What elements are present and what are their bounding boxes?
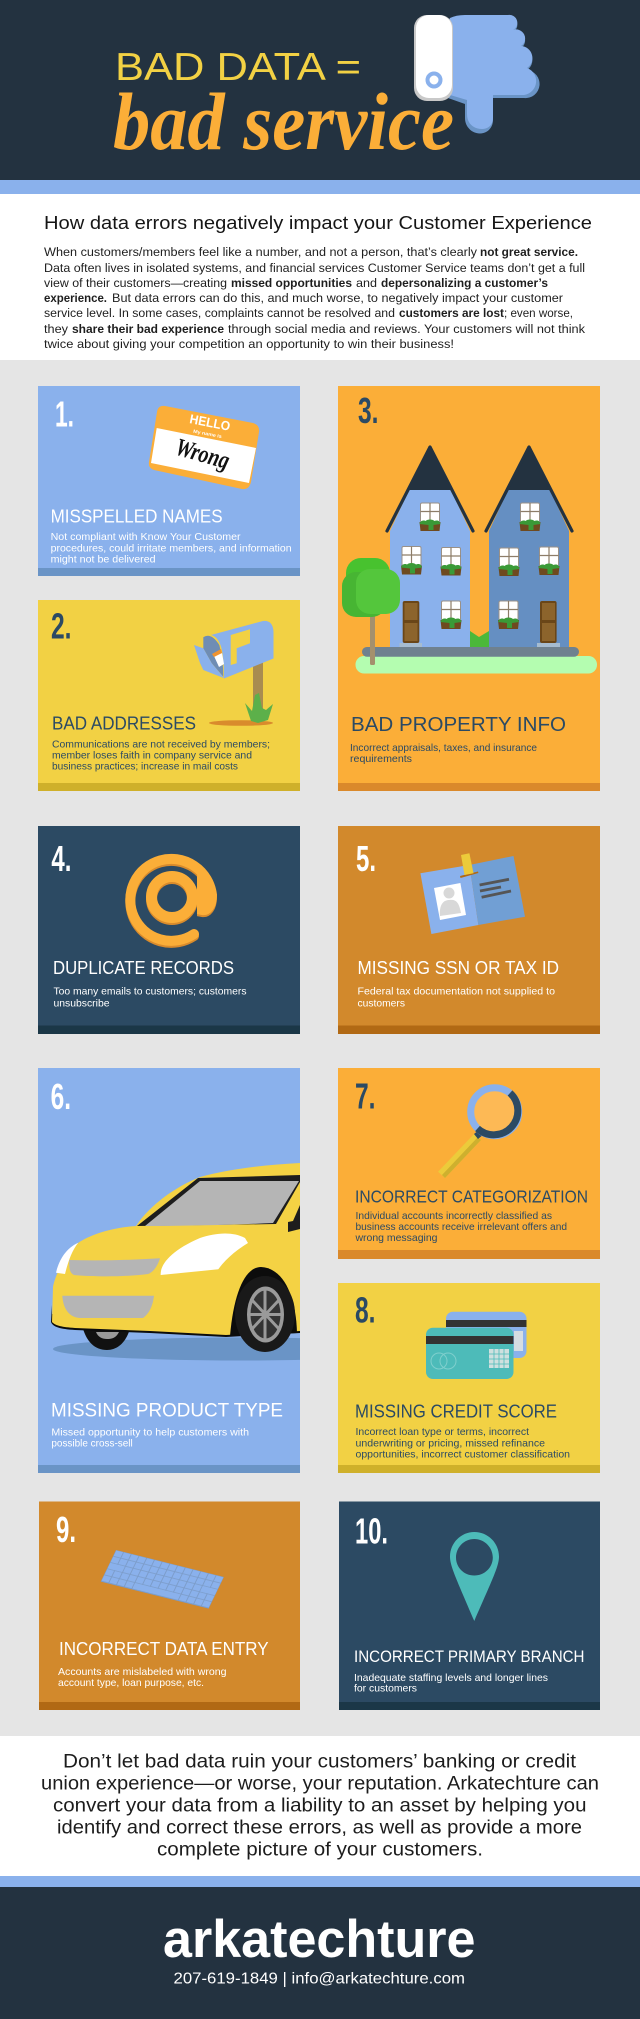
number 2: 2. <box>51 606 72 646</box>
number 1: 1. <box>55 394 74 434</box>
title: INCORRECT CATEGORIZATION <box>355 1187 588 1207</box>
icon: houses and tree <box>342 447 597 674</box>
number 10: 10. <box>355 1510 388 1552</box>
icon: name tag: Wrong <box>172 434 233 475</box>
icon: id card <box>420 853 525 934</box>
closing statement: identify and correct these errors, as well as provide a more <box>57 1817 582 1839</box>
description <box>354 1673 548 1695</box>
number 4: 4. <box>51 838 71 879</box>
intro paragraph <box>44 245 586 351</box>
card 9: incorrect data entry <box>39 1502 300 1710</box>
description: Accounts are mislabeled with wrong <box>58 1667 227 1678</box>
intro paragraph: depersonalizing a customer’s <box>381 276 548 290</box>
number 3: 3. <box>358 390 378 431</box>
icon: at sign <box>130 859 212 943</box>
description: Communications are not received by members; <box>52 739 270 750</box>
left house <box>387 447 473 649</box>
right house <box>486 447 572 647</box>
title: INCORRECT PRIMARY BRANCH <box>354 1648 584 1666</box>
description: procedures, could irritate members, and information <box>51 544 292 555</box>
intro paragraph: Data often lives in isolated systems, and financial services Customer Service teams don’t get a full <box>44 261 585 275</box>
description: Individual accounts incorrectly classified as <box>356 1211 552 1222</box>
card 3: bad property info <box>338 386 600 791</box>
number 6: 6. <box>51 1076 71 1117</box>
intro paragraph: not great service. <box>480 245 578 259</box>
title: BAD PROPERTY INFO <box>351 714 566 736</box>
icon: credit cards <box>426 1312 526 1379</box>
card 4: duplicate records <box>38 826 300 1034</box>
icon: name tag: My name is <box>193 429 223 439</box>
number 5: 5. <box>356 838 376 879</box>
description: Inadequate staffing levels and longer lines <box>354 1673 548 1684</box>
title: MISSPELLED NAMES <box>51 506 223 526</box>
header banner <box>0 0 640 194</box>
description: might not be delivered <box>51 555 156 566</box>
icon: mailbox <box>194 621 274 726</box>
card 10: incorrect primary branch <box>339 1502 600 1710</box>
intro paragraph: missed opportunities <box>231 276 352 290</box>
card 2: bad addresses <box>38 600 300 791</box>
closing statement: complete picture of your customers. <box>157 1838 483 1860</box>
title: BAD ADDRESSES <box>52 713 196 733</box>
icon: magnifying glass <box>438 1088 519 1178</box>
description: Federal tax documentation not supplied to <box>358 986 555 997</box>
description: wrong messaging <box>354 1233 438 1244</box>
intro paragraph: But data errors can do this, and much worse, to negatively impact your customer <box>112 291 563 305</box>
card 8: missing credit score <box>338 1283 600 1473</box>
footer <box>0 1876 640 2019</box>
gray panel background <box>0 360 640 1736</box>
tree <box>342 558 400 665</box>
intro paragraph: service level. In some cases, complaints cannot be resolved and <box>44 306 395 320</box>
title: MISSING SSN OR TAX ID <box>358 958 559 978</box>
intro section <box>44 213 592 351</box>
description <box>58 1667 227 1689</box>
description <box>358 986 555 1010</box>
description: requirements <box>350 754 412 765</box>
icon: name tag <box>149 406 259 489</box>
card 5: missing ssn or tax id <box>338 826 600 1034</box>
description <box>354 1211 567 1244</box>
description: unsubscribe <box>54 999 110 1010</box>
number 8: 8. <box>355 1290 376 1331</box>
closing statement <box>41 1751 599 1860</box>
title: MISSING CREDIT SCORE <box>355 1402 557 1422</box>
icon: yellow car <box>51 1163 300 1360</box>
description: account type, loan purpose, etc. <box>58 1678 204 1689</box>
description: Not compliant with Know Your Customer <box>51 532 241 543</box>
description: customers <box>358 999 405 1010</box>
intro paragraph: they <box>44 322 69 336</box>
title: MISSING PRODUCT TYPE <box>51 1401 283 1422</box>
intro paragraph: ; even worse, <box>504 306 573 320</box>
contact details: 207-619-1849 | info@arkatechture.com <box>174 1971 465 1988</box>
card 1: misspelled names <box>38 386 300 576</box>
number 9: 9. <box>56 1509 76 1550</box>
intro paragraph: and <box>356 276 377 290</box>
description: Too many emails to customers; customers <box>54 986 246 997</box>
intro paragraph: share their bad experience <box>72 322 224 336</box>
description: business accounts receive irrelevant offers and <box>356 1222 567 1233</box>
closing statement: convert your data from a liability to an asset by helping you <box>53 1795 586 1817</box>
intro paragraph: experience. <box>44 291 107 305</box>
description: underwriting or pricing, missed refinance <box>356 1439 545 1450</box>
closing statement: union experience—or worse, your reputation. Arkatechture can <box>41 1773 599 1795</box>
description <box>51 1428 249 1450</box>
intro paragraph: view of their customers—creating <box>44 276 227 290</box>
closing statement: Don’t let bad data ruin your customers’ banking or credit <box>63 1751 577 1773</box>
intro heading: How data errors negatively impact your Customer Experience <box>44 213 592 233</box>
description <box>51 532 292 566</box>
description: possible cross-sell <box>51 1439 133 1450</box>
title: INCORRECT DATA ENTRY <box>59 1639 269 1659</box>
description <box>54 986 246 1010</box>
intro paragraph: When customers/members feel like a number, and not a person, that’s clearly <box>44 245 478 259</box>
description <box>52 739 270 772</box>
description: Missed opportunity to help customers with <box>51 1428 249 1439</box>
card 6: missing product type <box>38 1068 300 1473</box>
description: Incorrect appraisals, taxes, and insurance <box>350 743 537 754</box>
intro paragraph: twice about giving your competition an opportunity to win their business! <box>44 337 454 351</box>
icon: keyboard <box>101 1550 224 1609</box>
description: Incorrect loan type or terms, incorrect <box>356 1427 529 1438</box>
icon: map pin <box>450 1532 499 1621</box>
icon: thumbs down <box>414 15 540 134</box>
description: business practices; increase in mail costs <box>52 761 238 772</box>
title: DUPLICATE RECORDS <box>53 958 234 978</box>
description: member loses faith in company service and <box>52 750 252 761</box>
number 7: 7. <box>355 1076 376 1117</box>
card 7: incorrect categorization <box>338 1068 600 1259</box>
icon: name tag: HELLO <box>188 411 232 434</box>
intro paragraph: through social media and reviews. Your customers will not think <box>228 322 586 336</box>
description: for customers <box>354 1684 417 1695</box>
title line one: BAD DATA = <box>115 46 361 89</box>
title line two: bad service <box>113 76 454 167</box>
description: opportunities, incorrect customer classification <box>356 1450 570 1461</box>
description <box>356 1427 570 1461</box>
description <box>350 743 537 765</box>
intro paragraph: customers are lost <box>399 306 504 320</box>
logo wordmark: arkatechture <box>163 1910 476 1969</box>
